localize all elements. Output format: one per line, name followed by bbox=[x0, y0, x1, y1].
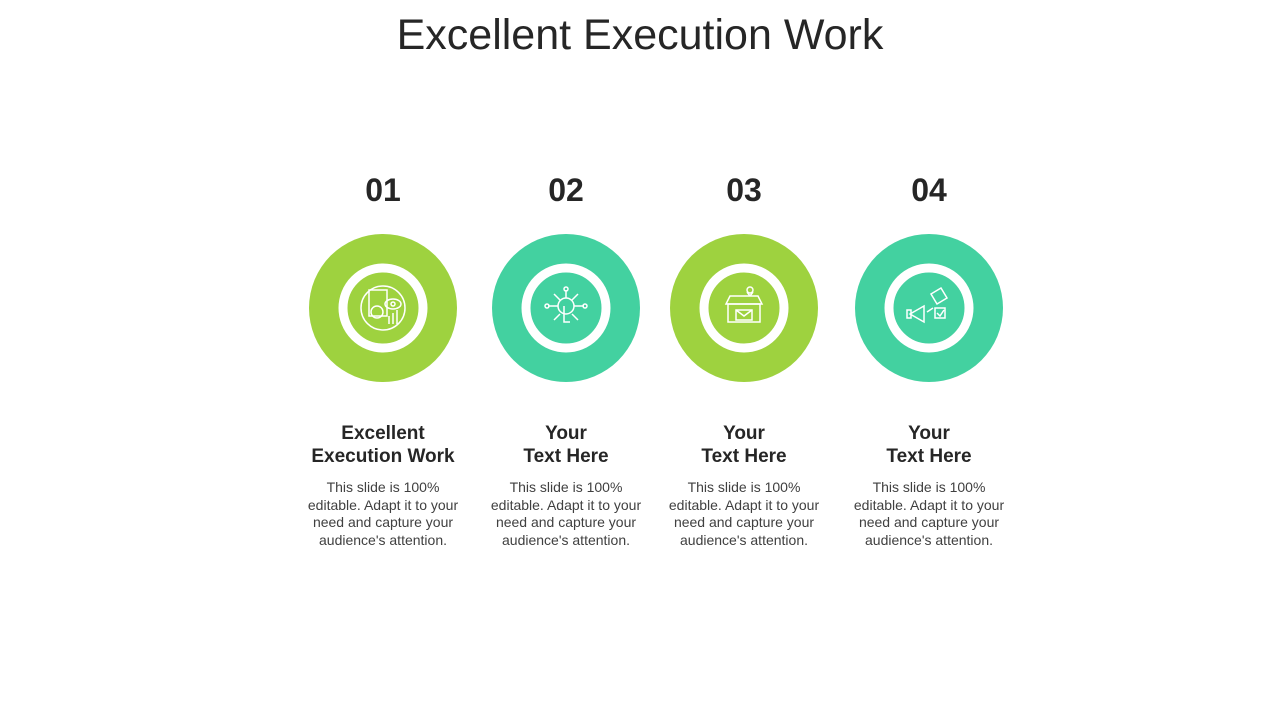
heading 1: Excellent bbox=[341, 423, 425, 444]
text 3: This slide is 100% editable. Adapt it to your need and capture your audience's attention. bbox=[669, 479, 819, 548]
heading 2: Text Here bbox=[523, 446, 609, 467]
heading 4: Text Here bbox=[886, 446, 972, 467]
icon circle 3 bbox=[670, 234, 818, 382]
number 04: 04 bbox=[911, 172, 947, 208]
number 01: 01 bbox=[365, 172, 401, 208]
text 2: This slide is 100% editable. Adapt it to your need and capture your audience's attention. bbox=[491, 479, 641, 548]
icon circle 2 bbox=[492, 234, 640, 382]
panel: step 1 bbox=[308, 172, 458, 548]
heading 2 bbox=[523, 423, 609, 467]
heading 2: Your bbox=[545, 423, 587, 444]
heading 4: Your bbox=[908, 423, 950, 444]
heading 3: Your bbox=[723, 423, 765, 444]
text 4: This slide is 100% editable. Adapt it to your need and capture your audience's attention. bbox=[854, 479, 1004, 548]
icon circle 4 bbox=[855, 234, 1003, 382]
icon circle 1 bbox=[309, 234, 457, 382]
number 03: 03 bbox=[726, 172, 762, 208]
heading 4 bbox=[886, 423, 972, 467]
heading 3 bbox=[701, 423, 787, 467]
panel: step 3 bbox=[669, 172, 819, 548]
heading 1 bbox=[311, 423, 455, 467]
panel: step 4 bbox=[854, 172, 1004, 548]
heading 3: Text Here bbox=[701, 446, 787, 467]
title: Excellent Execution Work bbox=[397, 11, 883, 59]
number 02: 02 bbox=[548, 172, 584, 208]
text 1: This slide is 100% editable. Adapt it to your need and capture your audience's attention. bbox=[308, 479, 458, 548]
heading 1: Execution Work bbox=[311, 446, 455, 467]
panel: step 2 bbox=[491, 172, 641, 548]
